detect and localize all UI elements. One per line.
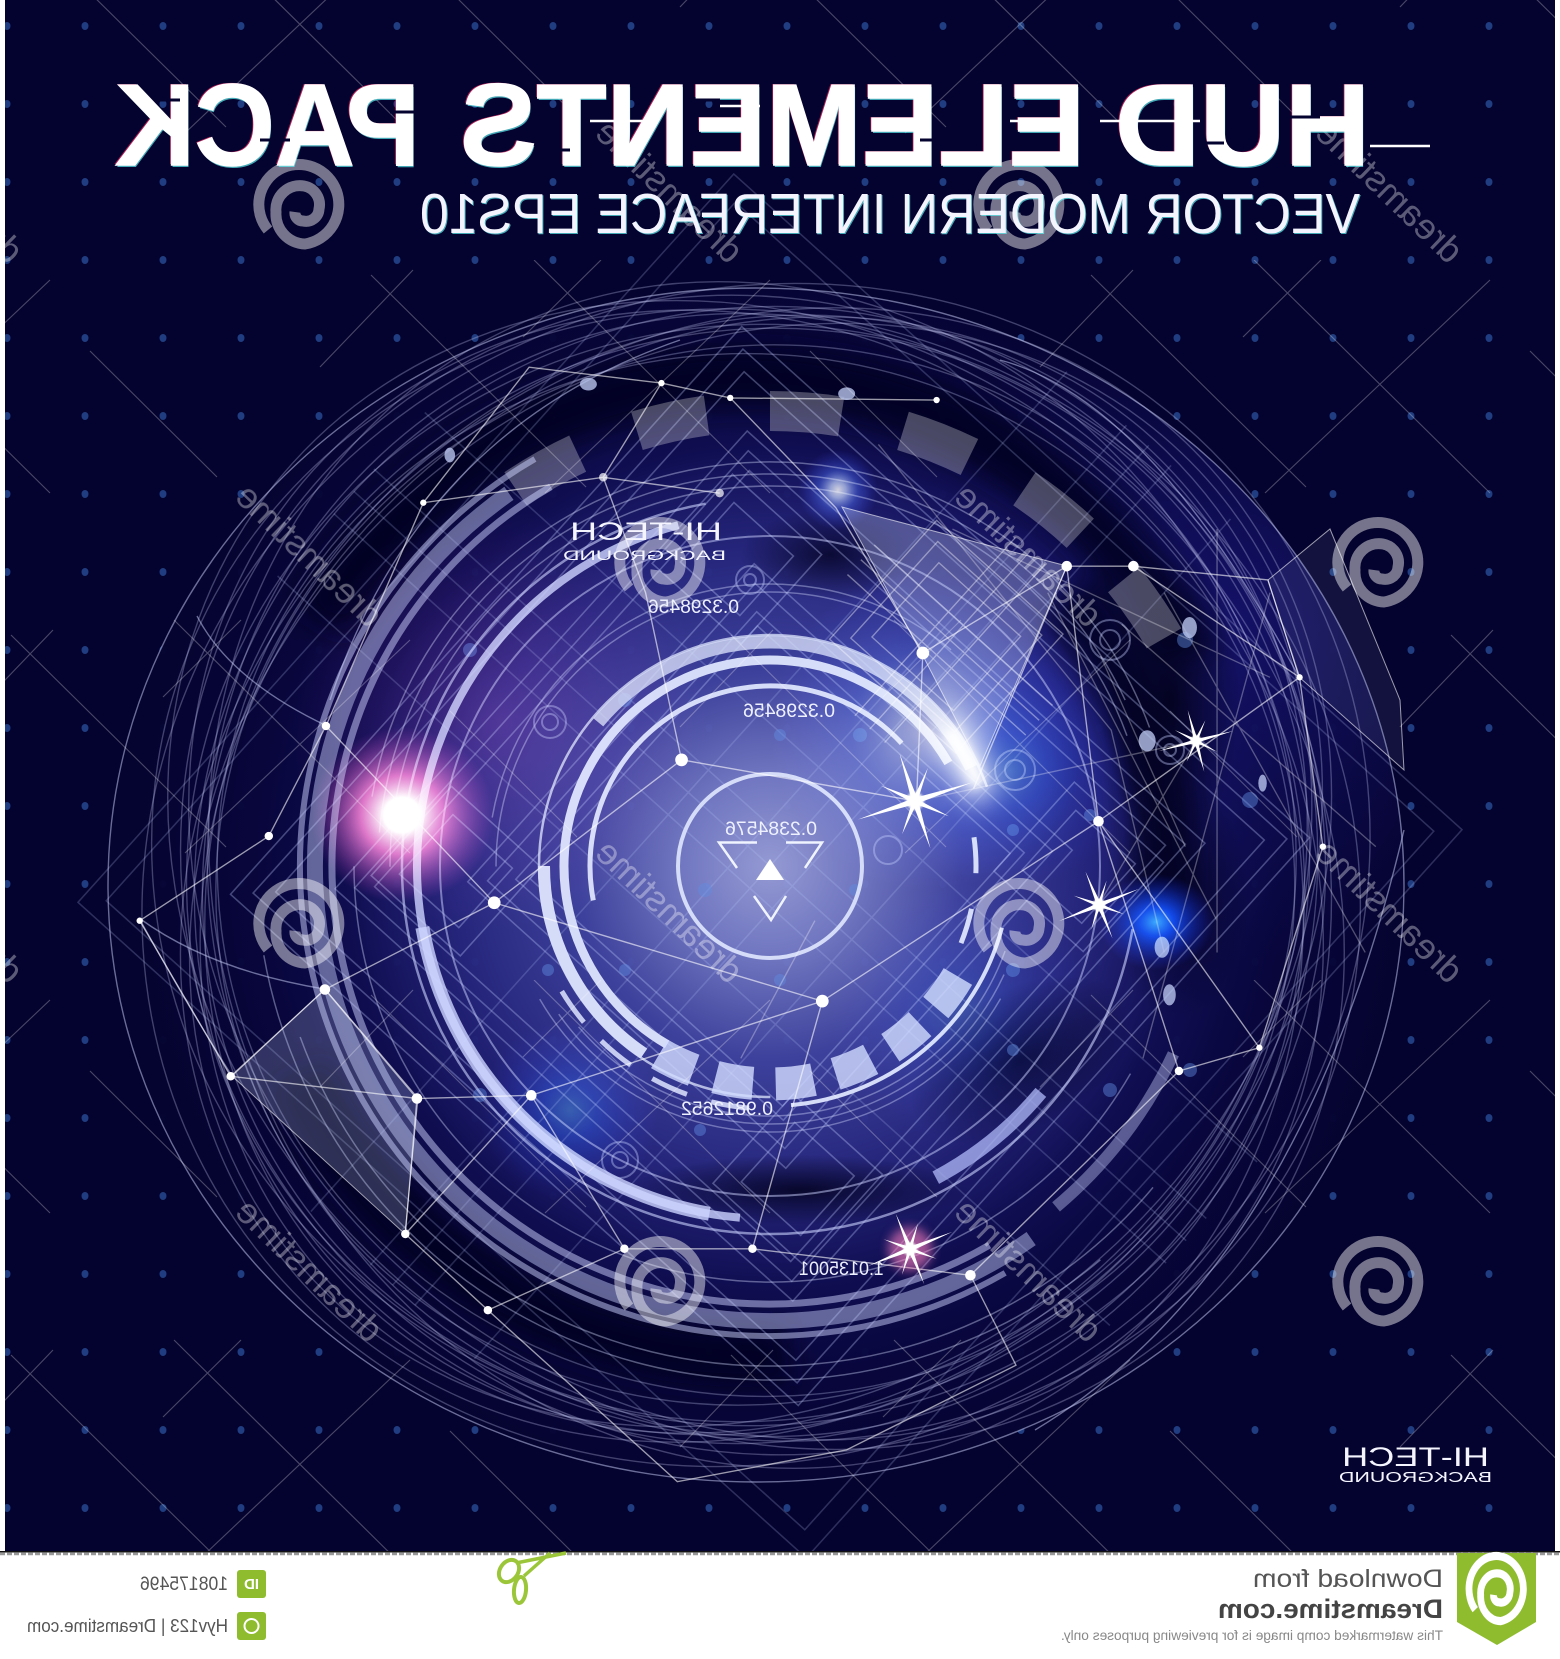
light flare: white-blue right of centre xyxy=(480,450,1130,1200)
network nodes xyxy=(137,380,1326,1314)
facet texture lines xyxy=(781,471,1119,809)
footer: image id xyxy=(140,1570,266,1598)
title: PACK xyxy=(116,62,421,192)
title: ELEMENTS xyxy=(461,62,1086,192)
inner HUD rings xyxy=(454,550,1086,1182)
label: hi-tech background centre: BACKGROUND xyxy=(563,547,726,563)
footer: image id: 108175496 xyxy=(140,1574,228,1595)
dark bands xyxy=(274,335,1225,1392)
light flare: pink xyxy=(290,510,710,930)
star flares xyxy=(842,700,1241,1301)
outer segmented top blocks xyxy=(138,234,1402,1498)
text watermarks: dreamstime xyxy=(947,1190,1111,1350)
footer: author credit: Hyv123 | Dreamstime.com xyxy=(27,1616,228,1636)
footer: image id: ID xyxy=(244,1576,259,1593)
text watermarks: dreamstime xyxy=(947,475,1111,635)
text watermarks: dreamstime xyxy=(588,831,752,991)
outer rings xyxy=(128,224,1412,1508)
translucent facets xyxy=(232,507,1404,1234)
title: ELEMENTS xyxy=(460,60,1085,190)
icon: dreamstime banner xyxy=(1457,1553,1536,1645)
grey oval nodes xyxy=(444,378,1267,1005)
text watermarks: dreamstime xyxy=(1308,831,1472,991)
title: HUD xyxy=(1113,59,1368,189)
footer: download text: This watermarked comp image is for previewing purposes only. xyxy=(1061,1628,1443,1643)
title: PACK xyxy=(115,60,420,190)
left page margin xyxy=(0,0,5,1552)
text watermarks: dreamstime xyxy=(1308,111,1472,271)
blue dots xyxy=(463,632,1258,1136)
label: hi-tech background bottom right: HI-TECH xyxy=(1342,1442,1489,1472)
title xyxy=(114,59,1430,192)
text watermarks: dreamstime xyxy=(588,111,752,271)
HUD readouts xyxy=(648,597,884,1280)
title: HUD xyxy=(1116,62,1371,192)
footer: download text xyxy=(1061,1565,1443,1643)
title: PACK xyxy=(114,59,418,189)
text watermarks: dreamstime xyxy=(228,475,392,635)
HUD readouts: 0.3298456 xyxy=(743,701,835,722)
right page margin xyxy=(1555,0,1560,1552)
title: ELEMENTS xyxy=(458,59,1084,189)
centre triangles icon xyxy=(719,842,822,920)
HUD readouts: 1.0135001 xyxy=(799,1259,884,1280)
label: hi-tech background bottom right xyxy=(1339,1442,1492,1486)
title: HUD xyxy=(1115,60,1370,190)
network mesh xyxy=(137,367,1376,1482)
text watermarks xyxy=(0,111,1472,1350)
footer: author credit xyxy=(27,1612,266,1640)
small concentric markers xyxy=(534,566,1184,1178)
bright ring glare xyxy=(456,552,1084,1180)
light flare: deep blue xyxy=(1098,874,1214,970)
footer: download text: Download from xyxy=(1253,1565,1443,1593)
subtitle: VECTOR MODERN INTERFACE EPS10 xyxy=(420,182,1360,246)
spiral watermarks xyxy=(259,164,1418,1321)
footer strip xyxy=(0,1551,1560,1659)
text watermarks: dreamstime xyxy=(228,1190,392,1350)
label: hi-tech background centre xyxy=(563,518,726,563)
icon: scissors xyxy=(495,1553,566,1603)
HUD readouts: 0.2384576 xyxy=(725,819,817,840)
sphere body xyxy=(160,299,1402,1434)
label: hi-tech background bottom right: BACKGROUND xyxy=(1339,1469,1492,1486)
footer: download text: Dreamstime.com xyxy=(1218,1594,1443,1624)
HUD readouts: 0.9812652 xyxy=(681,1099,773,1120)
dark sphere patches xyxy=(630,510,1250,1225)
HUD readouts: 0.3298456 xyxy=(648,597,739,618)
label: hi-tech background centre: HI-TECH xyxy=(570,518,722,546)
subtitle: VECTOR MODERN INTERFACE EPS10 xyxy=(421,183,1361,247)
